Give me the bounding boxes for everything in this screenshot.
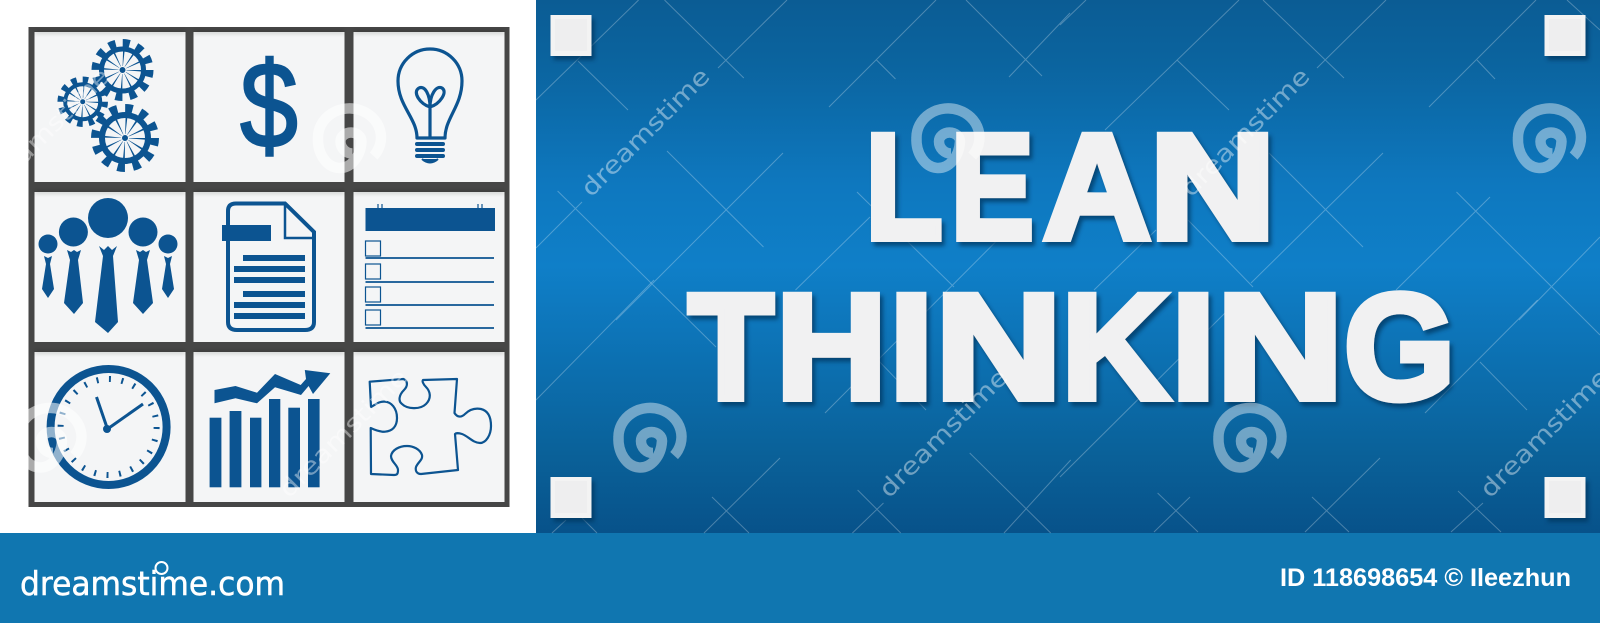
cell edge shading — [34, 32, 504, 352]
corner squares — [550, 15, 1586, 518]
white left background — [0, 0, 536, 533]
icon: gears — [61, 43, 154, 168]
title: THINKING: G — [1344, 262, 1455, 430]
title: THINKING: N — [935, 262, 1062, 430]
watermark dreamstime text: dreamstime — [1474, 363, 1600, 503]
grid frame — [28, 27, 510, 507]
bottom credit bar — [0, 533, 1600, 623]
watermark dreamstime text — [0, 62, 1600, 503]
title: THINKING: T — [688, 262, 774, 430]
watermark spirals — [618, 108, 1581, 468]
icon: checklist — [366, 204, 495, 328]
faint watermark spirals over grid — [18, 108, 381, 468]
title: LEAN: E — [951, 102, 1034, 270]
title: LEAN: N — [1149, 102, 1276, 270]
icon: document — [222, 204, 314, 330]
watermark dreamstime text: dreamstime — [873, 363, 1013, 503]
logo small spiral — [156, 562, 168, 574]
credit: image id: ID 118698654 © Ileezhun — [1280, 564, 1571, 592]
icon: business people — [38, 198, 178, 333]
grid cells — [34, 32, 504, 502]
title: THINKING: I — [890, 262, 933, 430]
title: THINKING: H — [776, 262, 887, 430]
watermark dreamstime text: dreamstime — [1175, 62, 1315, 202]
title: THINKING: N — [1217, 262, 1343, 430]
watermark dreamstime text: dreamstime — [273, 363, 413, 503]
icon: dollar sign: $ — [240, 37, 298, 173]
title: LEAN: L — [866, 102, 942, 270]
panel: blue title background — [536, 0, 1600, 533]
panel: icon grid — [28, 27, 510, 507]
title: LEAN: A — [1043, 102, 1151, 270]
icon: puzzle piece — [370, 379, 491, 475]
logo: dreamstime.com: dreamstime.com — [20, 564, 285, 603]
icon: clock — [51, 369, 167, 485]
icon: light bulb — [398, 49, 462, 162]
title: THINKING: I — [1172, 262, 1215, 430]
corner square inner faces — [555, 19, 1581, 513]
icon: bar chart with rising arrow — [210, 370, 330, 487]
watermark line pattern — [536, 0, 1600, 533]
watermark dreamstime text: dreamstime — [575, 62, 715, 202]
title: THINKING: K — [1062, 262, 1169, 430]
